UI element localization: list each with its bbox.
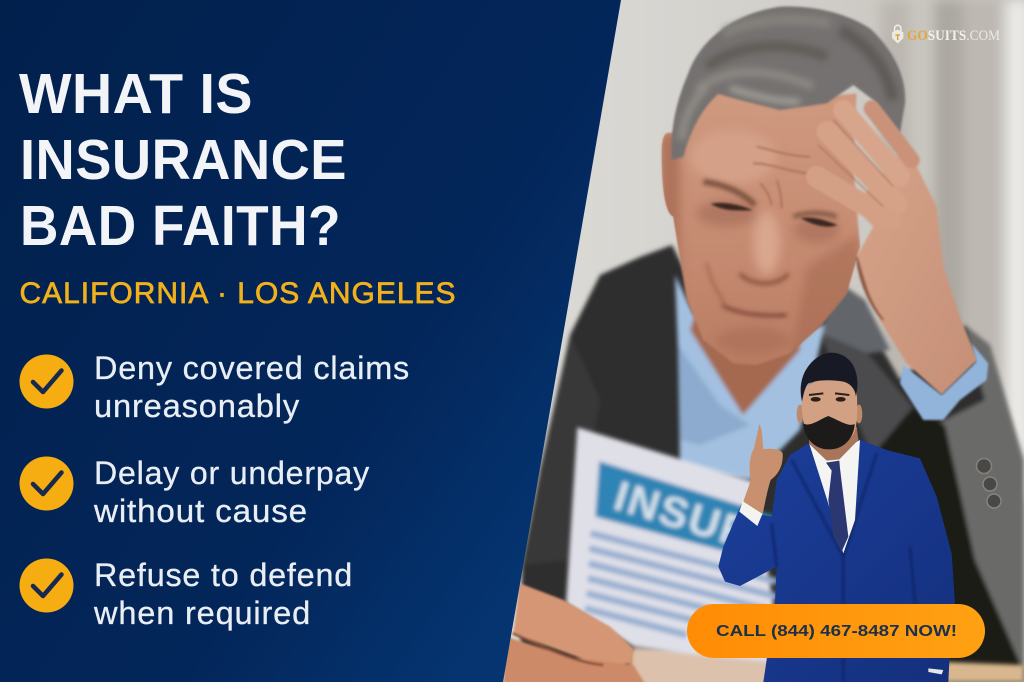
title bbox=[19, 62, 347, 258]
document text lines bbox=[585, 533, 777, 642]
hair bbox=[801, 353, 857, 402]
bullet text: Delay or underpay bbox=[94, 455, 370, 491]
document blue header bbox=[595, 461, 777, 565]
lawyer suit bbox=[718, 438, 955, 682]
man's hand on forehead bbox=[817, 108, 977, 395]
lawyer figure pointing upward bbox=[718, 353, 955, 682]
tie bbox=[826, 461, 848, 552]
logo wordmark: GOSUITS.COM bbox=[907, 28, 1000, 44]
icon: padlock bbox=[892, 25, 903, 43]
document header text: INSUR bbox=[609, 472, 759, 560]
man's jacket bbox=[520, 245, 1024, 682]
neck bbox=[808, 427, 858, 461]
bullet text: when required bbox=[93, 595, 311, 631]
shirt bbox=[809, 440, 860, 553]
bullet text bbox=[93, 557, 353, 631]
shirt cuff bbox=[900, 343, 988, 420]
bullet text bbox=[93, 455, 370, 529]
curtain backdrop bbox=[880, 0, 1024, 500]
logo: GoSuits.com bbox=[892, 25, 1000, 44]
title: WHAT IS bbox=[19, 62, 253, 126]
hair bbox=[671, 6, 905, 160]
face bbox=[662, 90, 860, 365]
sleeve buttons bbox=[976, 458, 1001, 508]
raised hand bbox=[743, 424, 783, 514]
bullet text bbox=[94, 350, 410, 424]
bullet text: unreasonably bbox=[94, 388, 300, 424]
icon: check circle bbox=[20, 456, 74, 510]
title: BAD FAITH? bbox=[20, 194, 341, 258]
bullet text: without cause bbox=[93, 493, 308, 529]
title: INSURANCE bbox=[20, 128, 347, 192]
watch cuff bbox=[928, 668, 943, 674]
insurance document bbox=[566, 427, 787, 682]
button label: CALL (844) 467-8487 NOW! bbox=[716, 623, 957, 640]
ears bbox=[797, 405, 862, 423]
table bbox=[630, 650, 1024, 682]
beard bbox=[803, 416, 855, 449]
icon: check circle bbox=[20, 354, 74, 408]
bullet 2 bbox=[20, 455, 370, 529]
hand holding document bbox=[503, 583, 645, 682]
head bbox=[802, 377, 857, 449]
subtitle: CALIFORNIA · LOS ANGELES bbox=[20, 277, 456, 310]
shirt cuff bbox=[739, 501, 763, 526]
hair strands bbox=[682, 20, 893, 140]
panel: left navy text panel bbox=[0, 0, 621, 682]
bullet 1 bbox=[20, 350, 410, 424]
suit shading bbox=[772, 453, 915, 682]
background photo: worried man reading insurance letter bbox=[480, 0, 1024, 682]
eyes and brows bbox=[809, 393, 849, 402]
man's head bbox=[660, 6, 988, 420]
face shading and features bbox=[660, 130, 860, 363]
bullet 3 bbox=[20, 557, 353, 631]
bullet text: Deny covered claims bbox=[94, 350, 410, 386]
call to action button bbox=[687, 604, 985, 658]
man's shirt and neck bbox=[675, 275, 825, 480]
icon: check circle bbox=[20, 558, 74, 612]
bullet text: Refuse to defend bbox=[94, 557, 353, 593]
